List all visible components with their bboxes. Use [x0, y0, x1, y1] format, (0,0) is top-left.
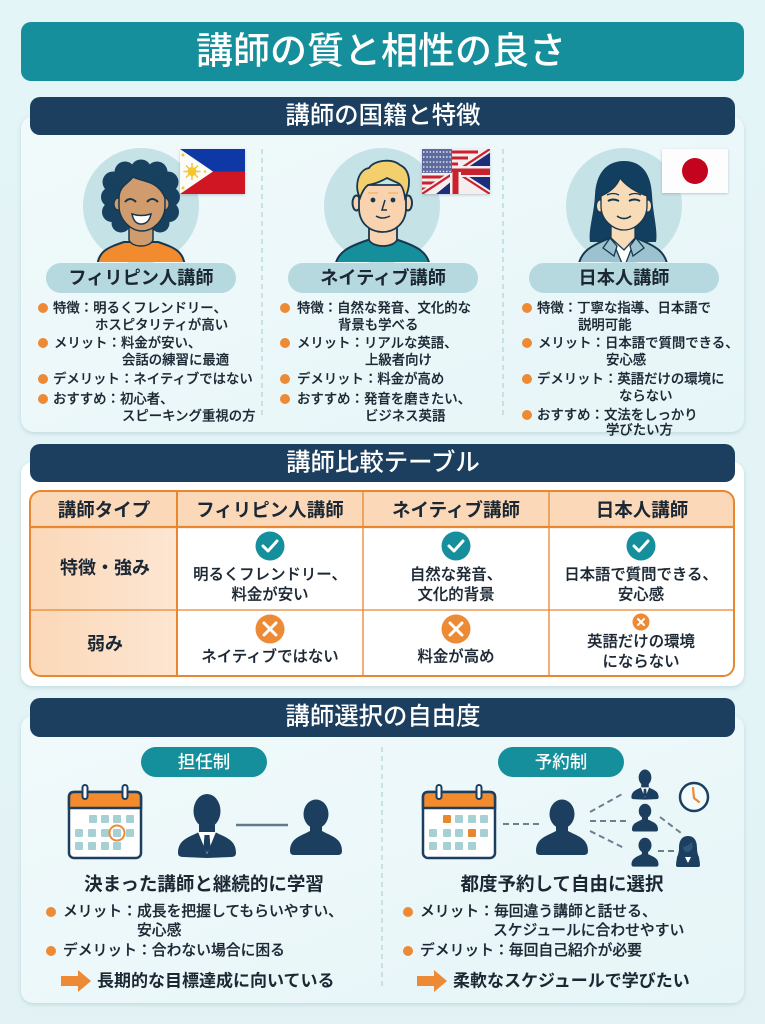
list: Japanese teacher details: おすすめ：文法をしっかり	[537, 408, 698, 422]
list: homeroom pros and cons: デメリット：合わない場合に困る	[63, 941, 285, 959]
card heading: Filipino: フィリピン人講師	[68, 267, 214, 288]
icon: teacher bottom	[631, 838, 659, 867]
panel: teacher nationalities	[21, 97, 744, 438]
list: native teacher details: デメリット：料金が高め	[297, 370, 444, 386]
cell: Filipino weakness: ネイティブではない	[201, 646, 339, 666]
card heading: Filipino	[46, 263, 236, 293]
icon: US and UK flag	[422, 149, 490, 194]
list: Japanese teacher details: デメリット：英語だけの環境に	[537, 370, 724, 386]
list: Japanese teacher details: 学びたい方	[606, 422, 673, 438]
list: Filipino teacher details: メリット：料金が安い、	[54, 334, 201, 350]
list: native teacher details	[280, 300, 471, 424]
pill: reservation system	[498, 747, 624, 777]
list: Filipino teacher details	[38, 300, 256, 424]
table header row: 日本人講師	[596, 500, 688, 520]
cell: Japanese weakness	[587, 614, 695, 670]
pill: reservation system: 予約制	[535, 752, 587, 772]
icon: teacher top	[631, 770, 659, 800]
list: native teacher details: ビジネス英語	[365, 408, 445, 424]
icon: student	[290, 800, 342, 855]
icon: calendar with circled date	[69, 785, 141, 858]
list: native teacher details: おすすめ：発音を磨きたい、	[297, 390, 471, 406]
card heading: Japanese	[529, 263, 719, 293]
pill: homeroom system: 担任制	[178, 752, 230, 772]
panel: comparison table	[21, 444, 744, 686]
list: Japanese teacher details: 説明可能	[578, 318, 632, 332]
connector line	[236, 824, 288, 826]
row label: strengths: 特徴・強み	[60, 558, 150, 578]
cell: Japanese strength	[564, 532, 718, 604]
list: homeroom pros and cons: メリット：成長を把握してもらいやすい、	[63, 903, 343, 920]
cell: native weakness	[418, 614, 494, 666]
cell: native strength: 文化的背景	[418, 586, 494, 604]
title banner: 講師の質と相性の良さ	[196, 30, 566, 72]
text: reservation recommendation: 柔軟なスケジュールで学びたい	[453, 970, 690, 990]
subheading: homeroom: 決まった講師と継続的に学習	[84, 874, 324, 894]
list: Japanese teacher details	[522, 300, 739, 438]
icon: teacher middle	[632, 804, 658, 832]
list: homeroom pros and cons	[46, 903, 343, 959]
list: reservation pros and cons: スケジュールに合わせやすい	[493, 922, 684, 939]
section heading: comparison	[30, 444, 735, 482]
card heading: native: ネイティブ講師	[320, 267, 446, 288]
list: reservation pros and cons: メリット：毎回違う講師と話せる、	[420, 902, 657, 920]
comparison table	[30, 491, 734, 676]
cell: native strength	[410, 532, 502, 604]
cell: Filipino strength	[193, 532, 347, 604]
list: Japanese teacher details: 安心感	[606, 352, 646, 368]
icon: Japanese flag	[662, 149, 728, 193]
section heading: nationalities	[30, 97, 735, 135]
section heading: selection freedom	[30, 698, 735, 737]
cell: Filipino weakness	[201, 614, 339, 666]
list: Filipino teacher details: 会話の練習に最適	[122, 352, 229, 368]
section heading: nationalities: 講師の国籍と特徴	[285, 102, 481, 130]
subheading: reservation: 都度予約して自由に選択	[461, 874, 664, 894]
row label: weaknesses: 弱み	[87, 634, 123, 654]
arrow: homeroom recommendation	[61, 970, 91, 992]
list: Japanese teacher details: 特徴：丁寧な指導、日本語で	[537, 300, 711, 316]
list: Japanese teacher details: メリット：日本語で質問できる、	[538, 334, 739, 350]
cell: Japanese weakness: 英語だけの環境	[587, 632, 695, 650]
cell: native strength: 自然な発音、	[410, 566, 502, 584]
list: Japanese teacher details: ならない	[619, 388, 673, 404]
text: homeroom recommendation: 長期的な目標達成に向いている	[97, 970, 334, 990]
list: Filipino teacher details: スピーキング重視の方	[122, 408, 256, 424]
arrow: reservation recommendation	[417, 970, 447, 992]
card heading: native	[288, 263, 478, 293]
icon: female teacher	[676, 836, 700, 867]
section heading: selection freedom: 講師選択の自由度	[285, 704, 481, 730]
list: Filipino teacher details: デメリット：ネイティブではない	[53, 370, 253, 386]
list: Filipino teacher details: おすすめ：初心者、	[53, 392, 174, 406]
icon: Japanese teacher avatar	[566, 148, 682, 270]
table header row: 講師タイプ	[58, 500, 151, 520]
list: native teacher details: 特徴：自然な発音、文化的な	[297, 300, 471, 316]
icon: Filipino teacher avatar	[83, 148, 199, 270]
dashed connectors	[503, 793, 681, 851]
card heading: Japanese: 日本人講師	[579, 267, 669, 288]
table header row	[58, 500, 688, 520]
icon: calendar with marked dates	[423, 785, 495, 858]
cell: Filipino strength: 料金が安い	[232, 584, 308, 604]
list: Filipino teacher details: 特徴：明るくフレンドリー、	[53, 300, 227, 316]
cell: Japanese weakness: にならない	[603, 652, 679, 670]
list: Filipino teacher details: ホスピタリティが高い	[95, 316, 228, 332]
cell: Japanese strength: 日本語で質問できる、	[564, 566, 718, 584]
icon: native teacher avatar	[324, 148, 440, 270]
cell: native weakness: 料金が高め	[418, 646, 494, 666]
icon: Philippine flag	[180, 149, 245, 194]
icon: clock	[680, 783, 708, 811]
section heading: comparison: 講師比較テーブル	[286, 448, 480, 476]
list: native teacher details: 上級者向け	[365, 352, 432, 368]
list: native teacher details: 背景も学べる	[338, 316, 418, 332]
icon: student	[536, 800, 588, 855]
cell: Japanese strength: 安心感	[618, 586, 664, 604]
list: reservation pros and cons: デメリット：毎回自己紹介が必要	[420, 941, 642, 959]
pill: homeroom system	[141, 747, 267, 777]
list: native teacher details: メリット：リアルな英語、	[297, 334, 458, 350]
list: homeroom pros and cons: 安心感	[137, 921, 182, 939]
cell: Filipino strength: 明るくフレンドリー、	[193, 566, 347, 584]
table header row: ネイティブ講師	[392, 500, 520, 520]
panel: teacher selection freedom	[21, 698, 744, 1003]
table header row: フィリピン人講師	[196, 500, 344, 520]
icon: suited teacher	[178, 794, 236, 858]
title banner	[21, 22, 744, 81]
list: reservation pros and cons	[403, 902, 684, 959]
